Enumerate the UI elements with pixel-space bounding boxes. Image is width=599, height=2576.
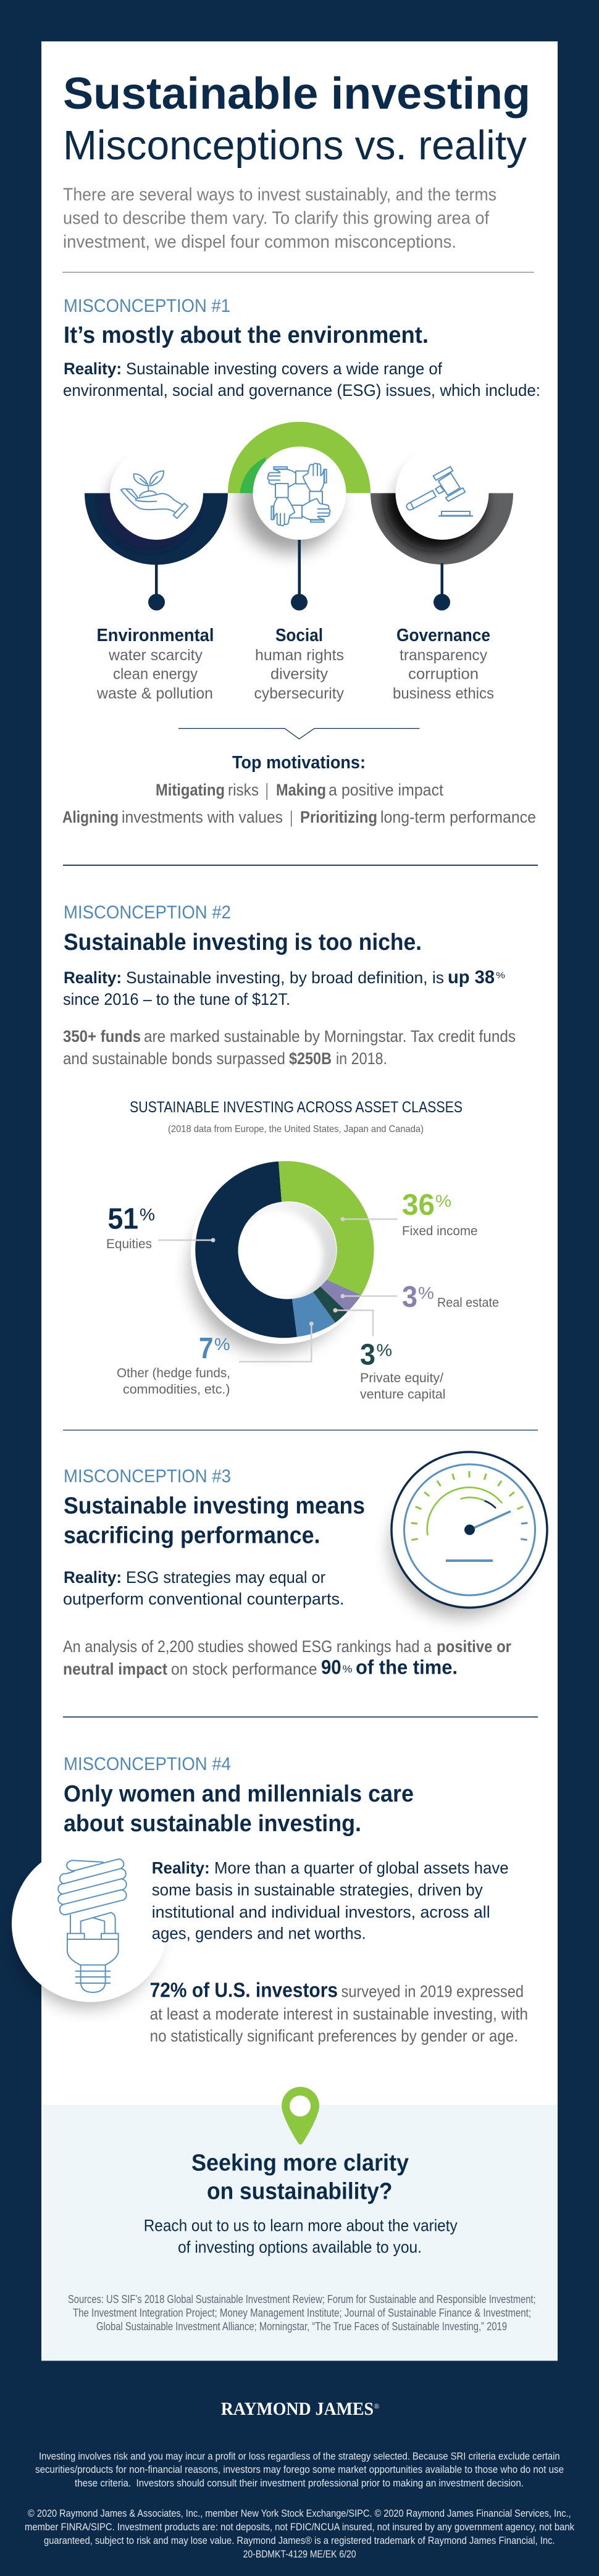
label: private equity 3%: 3 [360,1338,375,1371]
misconception 1 reality text [63,359,540,400]
label: other 7%: commodities, etc.) [123,1382,230,1397]
icon: four interlocked hands [267,463,330,526]
misconception 3 reality text: Reality: [64,1568,122,1587]
top motivations: Aligning [62,808,119,826]
logo: Raymond James: RAYMOND JAMES [221,2399,374,2419]
governance label: transparency [400,647,487,664]
legal copyright text [25,2507,574,2560]
label: private equity 3%: Private equity/ [360,1371,443,1385]
investor survey statistic: 72% of U.S. investors [150,1978,338,2001]
contact text [144,2217,458,2256]
analysis statistic text: % [342,1663,352,1675]
contact heading: on sustainability? [207,2179,393,2205]
risk disclaimer [35,2450,564,2489]
title [63,69,530,169]
intro text: There are several ways to invest sustainably, and the terms [63,185,496,205]
label: fixed income 36%: Fixed income [402,1224,478,1238]
misconception 1 reality text: Sustainable investing covers a wide range of [126,359,442,378]
slice: equities 51% [195,1161,297,1338]
contact heading: Seeking more clarity [191,2150,409,2176]
social label: diversity [270,666,329,683]
icon: location pin [282,2087,319,2144]
label: other 7% [117,1333,230,1397]
misconception 3 reality text: ESG strategies may equal or [126,1568,325,1587]
misconception 1 heading [64,296,429,348]
misconception 4 heading: MISCONCEPTION #4 [64,1754,231,1774]
intro text [63,185,496,252]
contact text: of investing options available to you. [178,2238,422,2256]
misconception 3 heading: Sustainable investing means [64,1493,365,1519]
icon: light bulb in circle [12,1845,169,2007]
top motivations: Prioritizing [300,808,377,826]
logo: Raymond James: ® [374,2402,379,2410]
top motivations [62,753,536,826]
icon: gavel [406,467,473,517]
misconception 2 heading: MISCONCEPTION #2 [64,902,231,923]
top motivations: Top motivations: [232,753,366,773]
misconception 4 reality text: Reality: [152,1859,210,1877]
top motivations: a positive impact [329,781,443,799]
misconception 3 reality text [63,1568,345,1608]
intro text: used to describe them vary. To clarify this growing area of [63,209,490,229]
icon: speedometer gauge [391,1452,547,1617]
chart title: (2018 data from Europe, the United States, Japan and Canada) [168,1124,424,1135]
social label: human rights [255,647,344,664]
stems and dots [148,537,450,610]
slice: fixed income 36% [279,1161,374,1295]
analysis statistic text: positive or [437,1637,511,1656]
label: real estate 3%: 3 [402,1281,417,1314]
intro text: investment, we dispel four common misconceptions. [63,232,456,252]
top motivations: Making [276,781,326,799]
social label: Social [275,626,323,645]
label: private equity 3%: venture capital [360,1387,446,1402]
environmental half ring [85,493,228,564]
social half ring [228,422,371,493]
misconception 2 reality text: up 38 [448,967,495,988]
misconception 2 reality text: % [496,970,505,981]
donut hole [257,1202,336,1299]
misconception 2 reality text [63,967,505,1009]
misconception 4 reality text: institutional and individual investors, across all [152,1903,490,1921]
light contact panel background [41,2105,558,2360]
chart leader lines [158,1217,398,1362]
governance half ring [371,493,513,564]
investor survey statistic [150,1978,528,2045]
investor survey statistic: at least a moderate interest in sustainable investing, with [150,2005,528,2023]
misconception 2 reality text: Reality: [64,968,122,987]
funds statistics text [63,1027,516,1068]
funds statistics text: $250B [289,1049,332,1068]
misconception 2 heading [64,902,422,955]
label: real estate 3% [402,1281,499,1314]
misconception 2 heading: Sustainable investing is too niche. [64,929,422,955]
slice: real estate 3% [320,1280,361,1312]
slice: other 7% [292,1292,335,1337]
environmental label: waste & pollution [96,685,213,702]
environmental label [96,626,214,702]
misconception 1 heading: MISCONCEPTION #1 [64,296,230,316]
label: fixed income 36%: % [435,1191,451,1210]
label: private equity 3% [360,1338,446,1402]
funds statistics text: are marked sustainable by Morningstar. Tax credit funds [144,1027,516,1046]
chart title [130,1099,463,1135]
misconception 4 heading: Only women and millennials care [64,1781,414,1807]
label: private equity 3%: % [377,1341,392,1360]
governance label: corruption [408,666,479,683]
slice: private equity 3% [313,1286,347,1323]
funds statistics text: in 2018. [336,1049,387,1068]
misconception 4 heading [64,1754,414,1837]
misconception 4 heading: about sustainable investing. [64,1811,361,1837]
chevron divider [178,729,420,739]
misconception 4 reality text: ages, genders and net worths. [152,1924,366,1943]
top motivations: long-term performance [380,808,536,826]
label: other 7%: Other (hedge funds, [117,1366,230,1380]
label: fixed income 36%: 36 [402,1189,435,1222]
icon: hand holding plant [121,471,188,518]
social label: cybersecurity [254,685,344,702]
label: other 7%: % [214,1335,230,1354]
sources: Global Sustainable Investment Alliance; Morningstar, “The True Faces of Sustainable Investing,” 2019 [96,2320,507,2333]
label: equities 51%: % [140,1205,155,1224]
title: Sustainable investing [63,69,530,119]
label: equities 51%: 51 [107,1203,138,1235]
label: other 7%: 7 [199,1333,214,1366]
sources [68,2293,536,2333]
environmental label: Environmental [96,626,214,645]
contact heading [191,2150,409,2205]
environmental label: clean energy [113,666,198,683]
governance label: Governance [396,626,490,645]
chart title: SUSTAINABLE INVESTING ACROSS ASSET CLASSES [130,1099,463,1116]
misconception 4 reality text: some basis in sustainable strategies, driven by [152,1881,483,1899]
label: equities 51%: Equities [106,1237,152,1251]
analysis statistic text [63,1637,511,1679]
misconception 4 reality text: More than a quarter of global assets have [214,1859,509,1877]
investor survey statistic: no statistically significant preferences by gender or age. [150,2026,518,2045]
environmental label: water scarcity [108,647,203,664]
analysis statistic text: neutral impact [63,1660,167,1679]
label: equities 51% [106,1203,155,1251]
label: real estate 3%: % [418,1283,434,1303]
legal copyright text: 20-BDMKT-4129 ME/EK 6/20 [243,2548,356,2560]
top motivations: Mitigating [156,781,225,799]
analysis statistic text: An analysis of 2,200 studies showed ESG rankings had a [63,1637,432,1656]
misconception 1 reality text: Reality: [64,359,122,378]
misconception 3 heading: MISCONCEPTION #3 [64,1466,231,1487]
misconception 2 reality text: Sustainable investing, by broad definition, is [126,968,444,987]
white content panel [41,41,558,2105]
contact text: Reach out to us to learn more about the variety [144,2217,458,2235]
donut chart [190,1161,374,1353]
analysis statistic text: of the time. [356,1656,458,1679]
investor survey statistic: surveyed in 2019 expressed [341,1982,524,2000]
ESG semicircle diagram [85,422,513,610]
governance label: business ethics [393,685,494,702]
governance label [393,626,494,702]
misconception 2 reality text: since 2016 – to the tune of $12T. [63,990,290,1009]
misconception 1 reality text: environmental, social and governance (ESG) issues, which include: [63,381,540,400]
funds statistics text: and sustainable bonds surpassed [63,1049,285,1068]
analysis statistic text: on stock performance [171,1660,317,1679]
misconception 3 heading: sacrificing performance. [64,1523,320,1549]
misconception 3 heading [64,1466,365,1549]
risk disclaimer: these criteria. Investors should consult their investment professional prior to making an investment decision. [75,2477,524,2489]
label: real estate 3%: Real estate [437,1296,499,1310]
misconception 3 reality text: outperform conventional counterparts. [63,1590,345,1608]
analysis statistic text: 90 [321,1656,341,1679]
social label [254,626,344,702]
misconception 1 heading: It’s mostly about the environment. [64,322,429,348]
label: fixed income 36% [402,1189,478,1238]
misconception 4 reality text [152,1859,509,1943]
top motivations: risks [228,781,259,799]
title: Misconceptions vs. reality [63,122,527,169]
top motivations: investments with values [122,808,283,826]
funds statistics text: 350+ funds [63,1027,141,1046]
